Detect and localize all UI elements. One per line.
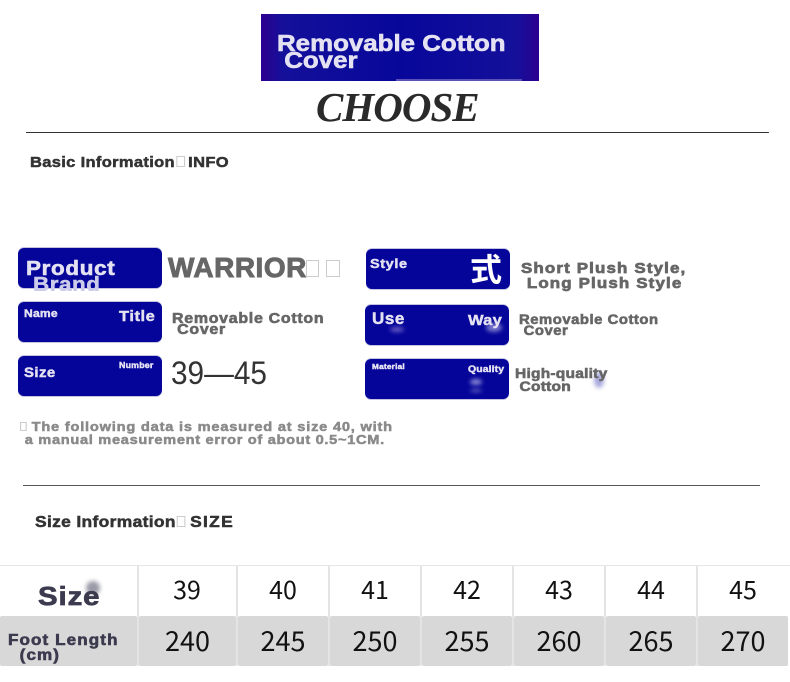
value: warrior: WARRIOR: [168, 252, 307, 283]
cell: 42: 42: [453, 571, 481, 607]
label: style: [366, 249, 510, 289]
cell: 40: 40: [269, 571, 297, 607]
value: high-quality cotton: High-quality Cotton: [515, 365, 607, 394]
cell: 43: 43: [545, 571, 573, 607]
measurement note: The following data is measured at size 40, with a manual measurement error of about 0.5~1CM.: [25, 419, 393, 447]
cell: 255: [422, 616, 512, 666]
cell: 44: 44: [637, 571, 665, 607]
placeholder glyph boxes: [306, 260, 340, 277]
cell: 250: 250: [353, 620, 397, 659]
value: size range: 39—45: [171, 355, 267, 391]
cell: 240: 240: [165, 620, 210, 659]
label text: product: Product: [26, 258, 115, 280]
row: size: [38, 571, 757, 611]
label glyph: style character: 式: [470, 245, 502, 291]
row: foot length: [0, 616, 788, 666]
cell: 260: [514, 616, 604, 666]
label text: way: Way: [468, 312, 502, 329]
cell: 270: [698, 616, 788, 666]
label text: size: Size: [24, 364, 56, 380]
label: name title: [18, 302, 162, 342]
cell: 255: 255: [445, 620, 489, 659]
label: use way: [365, 305, 509, 345]
label text: name: Name: [24, 308, 58, 320]
label text: style: Style: [370, 256, 408, 271]
row header: size: Size: [38, 581, 100, 611]
cell: 260: 260: [537, 620, 581, 659]
label text: use: Use: [372, 309, 405, 328]
banner title text: Removable Cotton Cover: [277, 30, 506, 73]
label: material quality: [365, 359, 509, 399]
panel: name title row: [18, 301, 659, 346]
value: removable cotton cover: Removable Cotton Cover: [519, 311, 659, 338]
label text: quality: Quality: [468, 364, 504, 375]
value: removable cotton cover: Removable Cotton Cover: [172, 311, 324, 338]
panel: product brand row: [18, 245, 686, 292]
cell: 41: 41: [361, 571, 389, 607]
panel: size number row: [18, 355, 608, 400]
table: size chart: [0, 565, 790, 666]
label text: title: Title: [119, 308, 155, 325]
cell: 245: [238, 616, 328, 666]
cell: 265: 265: [629, 620, 673, 659]
cell: 270: 270: [721, 620, 765, 659]
label: size number: [18, 356, 162, 396]
cell: 265: [606, 616, 696, 666]
row header cell: foot length: [0, 616, 137, 666]
cell: 240: [139, 616, 236, 666]
section heading: basic information: Basic Information INFO: [30, 154, 229, 171]
heading: CHOOSE: CHOOSE: [316, 84, 479, 130]
label text: material: Material: [372, 362, 405, 371]
cell: 45: 45: [729, 571, 757, 607]
label: product brand: [18, 248, 162, 288]
value: plush styles: Short Plush Style, Long Plush Style: [521, 260, 686, 292]
section heading: size information: Size Information SIZE: [35, 514, 234, 531]
row header text: foot length: Foot Length (cm): [8, 632, 119, 664]
cell: 250: [330, 616, 420, 666]
cell: 39: 39: [173, 571, 201, 607]
label text: number: Number: [119, 361, 154, 370]
cell: 245: 245: [261, 620, 305, 659]
title banner: [261, 14, 539, 81]
